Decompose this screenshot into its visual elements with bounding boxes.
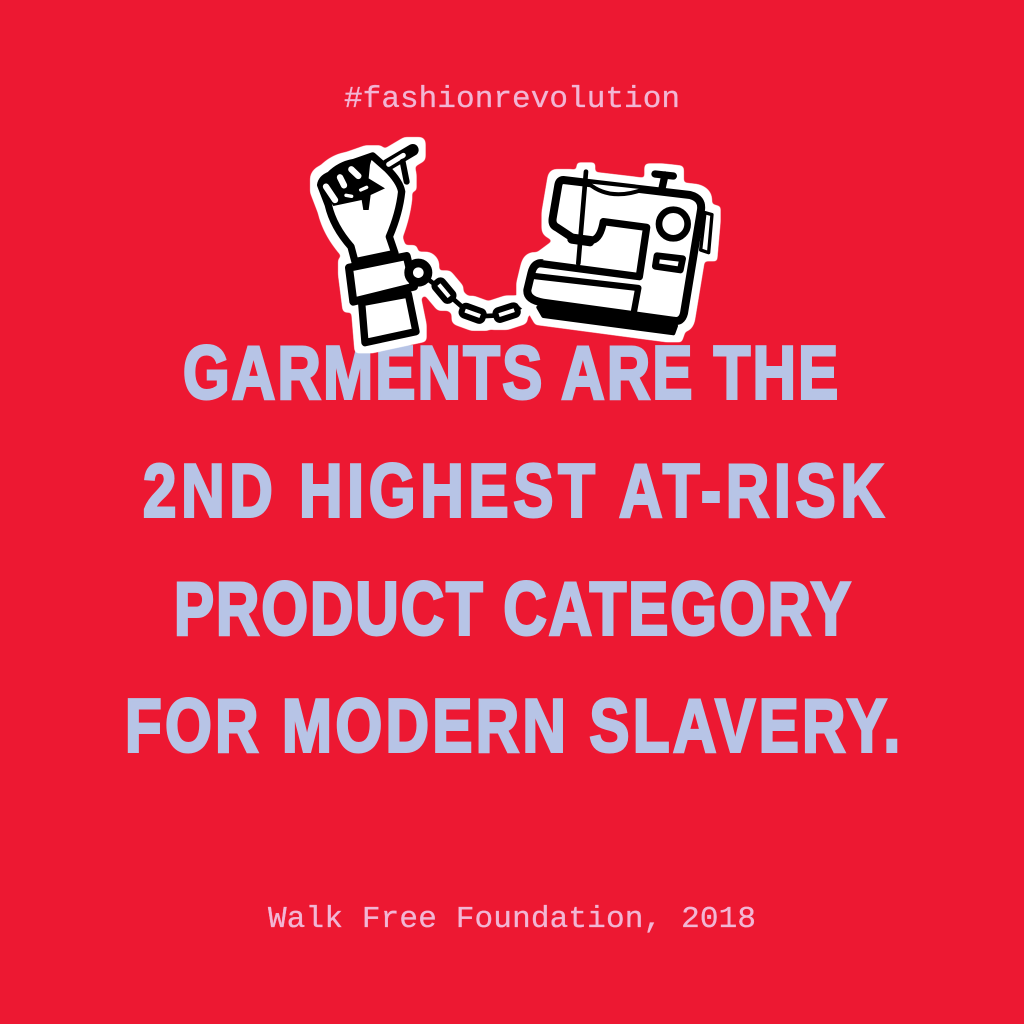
spool pin [655,174,673,190]
headline line 1: GARMENTS ARE THE [183,332,838,415]
finger highlights [346,187,367,196]
hashtag: #fashionrevolution [344,82,680,117]
cuff [349,256,414,302]
dial [659,210,688,238]
finger gaps [326,169,358,200]
machine base [538,307,676,333]
drawer [534,276,638,315]
hand [321,156,402,262]
machine body [527,180,701,321]
needle bar [578,172,586,263]
chain connectors [420,273,527,317]
display [655,256,683,270]
headline line 4: FOR MODERN SLAVERY. [125,685,900,768]
icon: chained fist holding a needle [318,150,527,343]
needle [387,150,413,165]
chain links [433,279,519,322]
fingers [318,153,385,210]
hand wheel [701,213,712,253]
throat opening [538,222,647,277]
thread arc [588,183,643,194]
headline [125,332,900,768]
headline line 2: 2ND HIGHEST AT-RISK [143,450,884,533]
headline line 3: PRODUCT CATEGORY [174,568,851,651]
sleeve [362,294,416,343]
source credit: Walk Free Foundation, 2018 [268,902,756,937]
icon: sewing machine [527,172,712,333]
chain ring [409,263,428,282]
